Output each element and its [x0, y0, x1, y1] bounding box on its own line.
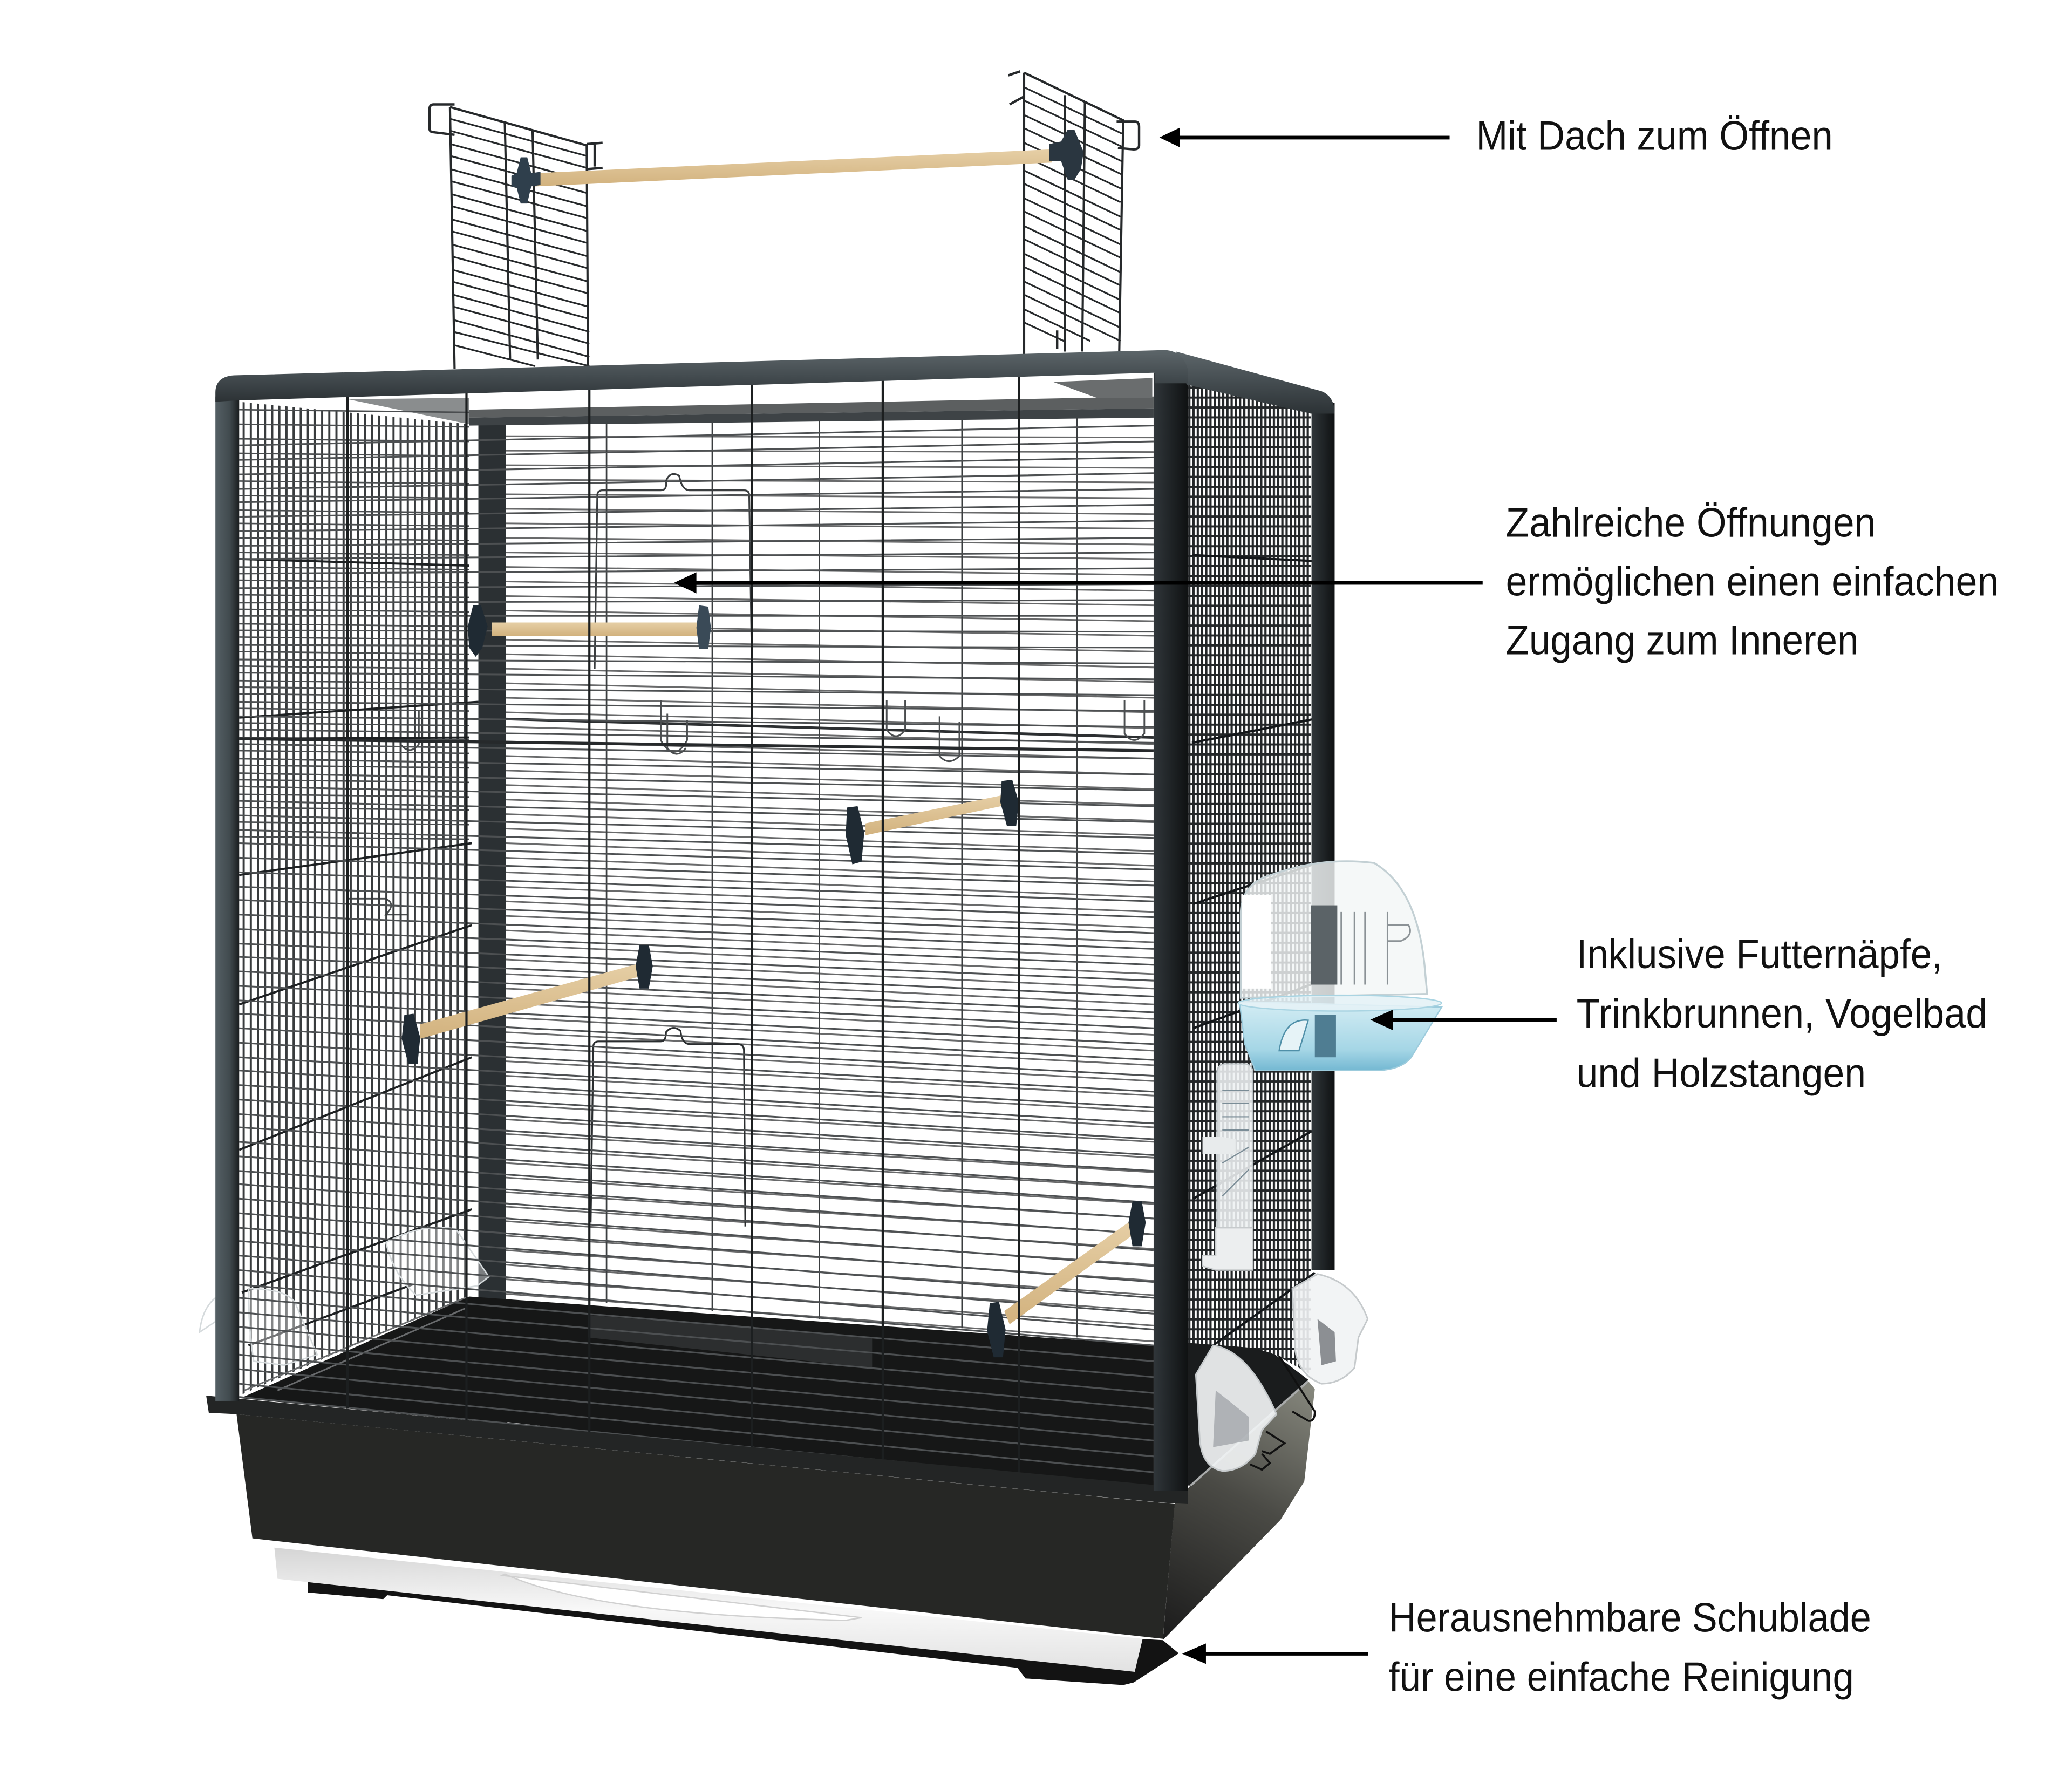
arrow: roof [1160, 127, 1450, 147]
roof door panels with top perch [430, 71, 1139, 369]
label: openings: Zahlreiche Öffnungen [1506, 500, 1876, 546]
label: drawer [1389, 1595, 1871, 1700]
callout: roof opening [1160, 113, 1833, 159]
label: openings: Zugang zum Inneren [1506, 617, 1858, 663]
perch right back [846, 780, 1019, 865]
door frame lower [591, 1028, 745, 1227]
callout: accessories [1371, 931, 1987, 1096]
tray side [1163, 1381, 1315, 1640]
tray gap light strip [507, 1422, 1057, 1484]
label: openings: ermöglichen einen einfachen [1506, 559, 1999, 604]
callout: drawer [1182, 1595, 1871, 1700]
drawer underside [308, 1582, 1178, 1685]
perch right front [987, 1201, 1146, 1357]
arrow: drawer [1182, 1643, 1368, 1664]
label: roof: Mit Dach zum Öffnen [1476, 113, 1833, 159]
top perch [512, 130, 1083, 203]
callout: many openings [674, 500, 1999, 663]
drawer [274, 1548, 1143, 1672]
door frame upper [595, 474, 752, 669]
side roof bar [1176, 351, 1334, 414]
feeder wire hangers [1250, 1356, 1315, 1469]
left roof panel [430, 104, 603, 369]
back corner post [479, 420, 506, 1303]
front middle rail [239, 739, 1154, 751]
right side mesh [1188, 385, 1328, 1374]
front roof bar [215, 350, 1188, 402]
label: accessories: und Holzstangen [1577, 1050, 1866, 1096]
front vertical wires [347, 377, 1019, 1478]
base rim [206, 1396, 1188, 1504]
perch upper back [468, 605, 711, 657]
bird bath [1238, 861, 1442, 1071]
left front post [215, 397, 239, 1401]
perch left front [401, 945, 653, 1064]
left side mesh [239, 402, 479, 1396]
label: drawer: Herausnehmbare Schublade [1389, 1595, 1871, 1641]
label: drawer: für eine einfache Reinigung [1389, 1655, 1854, 1700]
back wall vertical wires [606, 418, 1077, 1337]
back middle rail [506, 719, 1154, 738]
front clear feeders [1196, 1274, 1368, 1471]
arrow: accessories [1371, 1010, 1557, 1030]
silver side rim [1191, 1381, 1308, 1486]
right roof panel [1008, 71, 1139, 354]
label: accessories: Inklusive Futternäpfe, [1577, 931, 1942, 977]
roof mesh and back beam [347, 378, 1154, 426]
label: accessories [1577, 931, 1987, 1096]
tray front [236, 1414, 1175, 1639]
label: accessories: Trinkbrunnen, Vogelbad [1577, 991, 1987, 1037]
drawer handle [502, 1574, 862, 1620]
drinking fountain [1203, 1064, 1253, 1270]
back wall wires [506, 436, 1154, 1342]
front wall horizontal wires [239, 426, 1154, 1487]
arrow: openings [674, 572, 1483, 594]
back ledge [588, 1315, 872, 1368]
right rear post [1312, 403, 1334, 1270]
tray interior [241, 1296, 1154, 1487]
feed hooks [349, 700, 1144, 915]
cage body [200, 350, 1442, 1685]
right front post [1154, 373, 1188, 1491]
label: openings [1506, 500, 1999, 663]
left clear feeders [200, 1228, 489, 1365]
right floor corner [1188, 1343, 1308, 1486]
